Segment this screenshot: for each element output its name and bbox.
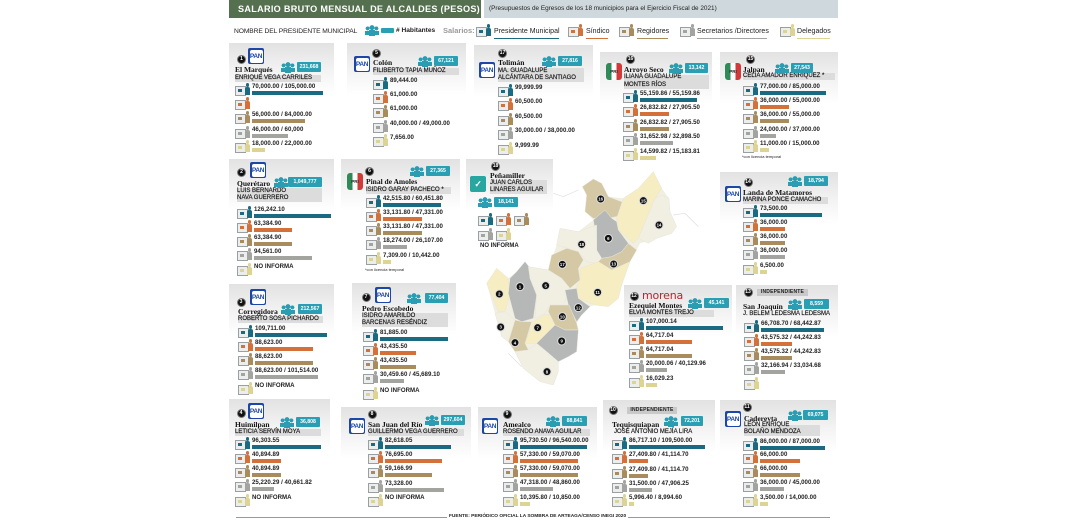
title bar — [229, 0, 481, 18]
panel: Huimilpan: 40,894.89 — [252, 451, 279, 458]
panel: Tequisquiapan: JOSÉ ANTONIO MEJÍA LIRA — [614, 428, 692, 434]
map of municipalities: 4 — [514, 340, 517, 345]
panel: Huimilpan: Huimilpan — [235, 420, 270, 429]
panel: Tolimán: 99,999.99 — [515, 84, 542, 91]
panel: Querétaro: 94,561.00 — [254, 248, 281, 255]
panel: Tolimán: 30,000.00 / 38,000.00 — [515, 127, 575, 134]
panel: Colón: 89,444.00 — [390, 77, 417, 84]
panel: El Marqués: 1 — [240, 56, 243, 62]
panel: Pinal de Amoles: PRI — [351, 179, 359, 184]
legend: delegados: Delegados — [797, 28, 831, 35]
panel: Corregidora — [229, 284, 334, 397]
panel: Amealco: 9 — [506, 410, 508, 416]
panel: Pinal de Amoles: 18,274.00 / 26,107.00 — [383, 237, 443, 244]
panel: Arroyo Seco: Arroyo Seco — [624, 65, 664, 74]
panel: Tequisquiapan: 10 — [610, 406, 616, 412]
panel: Amealco: Amealco — [503, 420, 531, 429]
panel: Corregidora: NO INFORMA — [255, 382, 295, 389]
panel: San Joaquín: 43,575.32 / 44,242.83 — [761, 334, 821, 341]
panel: Jalpan: 15 — [748, 56, 753, 62]
panel: Jalpan: 36,000.00 / 55,000.00 — [760, 111, 820, 118]
legend: inhabitants — [365, 25, 435, 36]
map of municipalities: 16 — [598, 197, 604, 202]
panel: Jalpan: 77,000.00 / 85,000.00 — [760, 83, 820, 90]
panel: Peñamiller: JUAN CARLOS — [490, 180, 532, 186]
panel: El Marqués: El Marqués — [235, 65, 273, 74]
panel: Pedro Escobedo — [352, 283, 456, 399]
map of municipalities: 2 — [498, 292, 501, 297]
panel: Pinal de Amoles: *con licencia temporal — [365, 267, 404, 272]
panel: Tolimán: 17 — [500, 50, 505, 56]
panel: El Marqués: 18,000.00 / 22,000.00 — [252, 140, 312, 147]
panel: Colón: 61,000.00 — [390, 105, 417, 112]
panel: Tequisquiapan: 27,409.80 / 41,114.70 — [629, 451, 689, 458]
panel: Cadereyta: 66,000.00 — [760, 465, 787, 472]
panel: Peñamiller: ✓ — [474, 178, 482, 188]
panel: Colón: 5 — [375, 50, 378, 56]
panel: Ezequiel Montes: 16,029.23 — [646, 375, 673, 382]
panel: Pedro Escobedo: Pedro Escobedo — [362, 304, 413, 313]
panel: Cadereyta: 86,000.00 / 87,000.00 — [760, 438, 820, 445]
map of municipalities: 10 — [560, 314, 565, 319]
panel: Pedro Escobedo: ISIDRO AMARILDO — [362, 312, 415, 318]
panel: Pedro Escobedo: 30,459.60 / 45,689.10 — [380, 371, 440, 378]
legend: sindico — [568, 24, 610, 39]
panel: Jalpan: 11,000.00 / 15,000.00 — [760, 140, 820, 147]
panel: Corregidora: 3 — [240, 298, 242, 304]
map of municipalities: 15 — [641, 198, 646, 203]
panel: Querétaro: 2 — [240, 169, 243, 175]
panel: Huimilpan: 36,808 — [300, 419, 316, 425]
panel: Querétaro: Querétaro — [237, 179, 270, 188]
panel: Pedro Escobedo: 81,885.00 — [380, 329, 407, 336]
panel: Cadereyta: 69,075 — [808, 412, 823, 418]
panel: Querétaro — [229, 159, 334, 277]
legend: presidente municipal — [476, 24, 560, 39]
legend: regidores: Regidores — [637, 28, 669, 35]
panel: Arroyo Seco: ILIANA GUADALUPE — [624, 74, 681, 80]
panel: Corregidora: 88,623.00 — [255, 339, 282, 346]
legend: salaries label: Salarios: — [443, 26, 475, 35]
map of municipalities: 1 — [519, 284, 522, 289]
panel: Arroyo Seco: PRI — [610, 69, 618, 74]
legend: president name: NOMBRE DEL PRESIDENTE MUNICIPAL — [234, 28, 357, 35]
subtitle bar — [484, 0, 838, 18]
map of municipalities: 17 — [560, 262, 565, 267]
legend: regidores — [619, 24, 669, 39]
panel: Landa de Matamoros — [720, 172, 838, 277]
panel: El Marqués — [229, 43, 334, 155]
panel: Tequisquiapan: 27,409.80 / 41,114.70 — [629, 466, 689, 473]
panel: Arroyo Seco: 31,652.98 / 32,898.50 — [640, 133, 700, 140]
panel: Landa de Matamoros: PAN — [727, 190, 739, 198]
panel: Peñamiller — [466, 159, 553, 251]
panel: Pedro Escobedo: 77,404 — [429, 295, 444, 301]
panel: Landa de Matamoros: MARINA PONCE CAMACHO — [743, 196, 821, 202]
panel: Tequisquiapan: 31,500.00 / 47,906.25 — [629, 480, 689, 487]
panel: Corregidora: ROBERTO SOSA PICHARDO — [238, 316, 319, 322]
map of municipalities: 18 — [579, 242, 585, 247]
panel: Tolimán: 9,999.99 — [515, 142, 539, 149]
panel: Arroyo Seco: 26,832.82 / 27,905.50 — [640, 119, 700, 126]
panel: Colón: 40,000.00 / 49,000.00 — [390, 120, 450, 127]
panel: Corregidora: PAN — [252, 294, 264, 300]
panel: Jalpan: 24,000.00 / 37,000.00 — [760, 126, 820, 133]
panel: Colón: 61,000.00 — [390, 91, 417, 98]
subtitle bar: (Presupuestos de Egresos de los 18 municipios para el Ejercicio Fiscal de 2021) — [489, 5, 717, 12]
panel: El Marqués: 231,668 — [300, 64, 318, 70]
panel: Landa de Matamoros: 36,000.00 — [760, 233, 787, 240]
map of municipalities: 7 — [536, 325, 539, 330]
panel: Ezequiel Montes: morena — [642, 289, 683, 302]
panel: Jalpan: Jalpan — [743, 65, 765, 74]
panel: San Juan del Río: NO INFORMA — [385, 494, 425, 501]
panel: Ezequiel Montes: ELVIA MONTES TREJO — [629, 310, 694, 316]
legend: delegados — [780, 24, 831, 39]
panel: El Marqués: 46,000.00 / 60,000 — [252, 126, 303, 133]
panel: Pinal de Amoles: 33,131.80 / 47,331.00 — [383, 209, 443, 216]
panel: Tolimán: Tolimán — [498, 58, 524, 67]
panel: Landa de Matamoros: 6,500.00 — [760, 262, 784, 269]
panel: Amealco: 47,318.00 / 48,860.00 — [520, 479, 580, 486]
panel: Amealco: 95,730.50 / 96,540.00.00 — [520, 437, 588, 444]
panel: Colón: FILIBERTO TAPIA MUÑOZ — [373, 68, 446, 74]
panel: Cadereyta — [720, 400, 836, 507]
map of municipalities: 5 — [544, 283, 547, 288]
map of municipalities: 8 — [546, 369, 549, 374]
panel: San Joaquín: San Joaquín — [743, 302, 783, 311]
panel: Pedro Escobedo: 7 — [365, 294, 367, 300]
panel: Pinal de Amoles: Pinal de Amoles — [366, 177, 417, 186]
legend — [234, 24, 831, 39]
panel: Peñamiller: NO INFORMA — [480, 243, 519, 249]
panel: San Joaquín: 66,708.70 / 68,442.87 — [761, 320, 821, 327]
panel: San Joaquín: INDEPENDIENTE — [761, 289, 804, 295]
panel: Pedro Escobedo: 43,435.50 — [380, 343, 407, 350]
panel: Pedro Escobedo: 43,435.50 — [380, 357, 407, 364]
panel: Cadereyta: 11 — [744, 404, 750, 410]
panel: Pedro Escobedo: PAN — [377, 292, 389, 298]
panel: Arroyo Seco: MONTES RÍOS — [624, 82, 666, 88]
panel: Pinal de Amoles: 6 — [368, 168, 371, 174]
panel: Corregidora: 88,623.00 — [255, 353, 282, 360]
panel: Landa de Matamoros: 18,794 — [808, 178, 824, 184]
panel: Cadereyta: BOLAÑO MENDOZA — [744, 428, 801, 434]
panel: Pinal de Amoles: 42,515.80 / 60,451.80 — [383, 195, 443, 202]
panel: San Juan del Río: 59,166.99 — [385, 465, 412, 472]
panel: Ezequiel Montes: Ezequiel Montes — [629, 301, 682, 310]
panel: San Juan del Río: 297,604 — [444, 417, 462, 423]
panel: Arroyo Seco: 14,599.82 / 15,183.81 — [640, 148, 700, 155]
panel: Jalpan: CELIA AMADOR ENRÍQUEZ * — [743, 73, 824, 79]
panel: San Joaquín: 32,166.94 / 33,034.68 — [761, 362, 821, 369]
panel: Ezequiel Montes: 64,717.04 — [646, 332, 673, 339]
map of municipalities: 14 — [657, 223, 662, 228]
panel: Huimilpan: 25,220.29 / 40,661.82 — [252, 479, 312, 486]
panel: Colón — [347, 43, 466, 149]
panel: Amealco: PAN — [484, 422, 496, 430]
panel: Pedro Escobedo: NO INFORMA — [380, 387, 420, 394]
panel: Querétaro: NO INFORMA — [254, 263, 294, 270]
panel: Huimilpan — [229, 399, 330, 507]
panel: San Juan del Río: 82,618.05 — [385, 437, 412, 444]
panel: Querétaro: 126,242.10 — [254, 206, 285, 213]
panel: San Juan del Río: 76,695.00 — [385, 451, 412, 458]
panel: Landa de Matamoros: 73,500.00 — [760, 205, 787, 212]
panel: Huimilpan: NO INFORMA — [252, 494, 292, 501]
panel: Pinal de Amoles: 7,309.00 / 10,442.00 — [383, 252, 440, 259]
panel: Huimilpan: 96,303.55 — [252, 437, 279, 444]
panel: Ezequiel Montes: 45,141 — [709, 300, 724, 306]
panel: Tequisquiapan: 5,996.40 / 8,994.60 — [629, 494, 682, 501]
panel: Querétaro: PAN — [252, 166, 264, 174]
panel: Querétaro: LUIS BERNARDO — [237, 188, 286, 194]
panel: Tolimán: MA. GUADALUPE — [498, 68, 547, 74]
panel: San Joaquín: 43,575.32 / 44,242.83 — [761, 348, 821, 355]
panel: Pedro Escobedo: BARCENAS RESÉNDIZ — [362, 320, 427, 326]
panel: Peñamiller: 18 — [493, 163, 498, 169]
panel: Querétaro: 1,049,777 — [293, 179, 317, 185]
panel: San Joaquín: 13 — [745, 288, 751, 294]
panel: Amealco: 57,330.00 / 59,070.00 — [520, 465, 580, 472]
panel: Arroyo Seco: 26,832.82 / 27,905.50 — [640, 104, 700, 111]
panel: San Juan del Río: 73,328.00 — [385, 480, 412, 487]
panel: Tolimán: 27,816 — [562, 58, 578, 64]
source footer: FUENTE: PERIÓDICO OFICIAL LA SOMBRA DE ARTEAGA/CENSO INEGI 2020 — [449, 514, 626, 519]
panel: San Juan del Río: GUILLERMO VEGA GUERRERO — [368, 428, 458, 434]
map of municipalities: 11 — [595, 290, 601, 295]
legend: secretarios: Secretarios /Directores — [697, 28, 769, 35]
panel: Huimilpan: PAN — [250, 408, 262, 414]
panel: Jalpan: PRI — [729, 69, 737, 74]
panel: Tequisquiapan: INDEPENDIENTE — [630, 407, 674, 413]
panel: Colón: 7,656.00 — [390, 134, 414, 141]
panel: Pinal de Amoles: 27,365 — [430, 168, 446, 174]
panel: Tequisquiapan: 86,717.10 / 109,500.00 — [629, 437, 692, 444]
map of municipalities: 3 — [499, 325, 502, 330]
panel: Cadereyta: 3,500.00 / 14,000.00 — [760, 494, 817, 501]
panel: Colón: Colón — [373, 58, 392, 67]
panel: Querétaro: NAVA GUERRERO — [237, 195, 288, 201]
panel: Ezequiel Montes: 20,000.06 / 40,129.96 — [646, 360, 706, 367]
panel: Amealco: 10,395.80 / 10,850.00 — [520, 494, 580, 501]
panel: Amealco: ROSENDO ANAVA AGUILAR — [503, 428, 581, 434]
panel: El Marqués: PAN — [250, 52, 262, 60]
panel: Huimilpan: 4 — [240, 410, 242, 416]
panel: Peñamiller: Peñamiller — [490, 171, 525, 180]
panel: San Juan del Río — [341, 407, 471, 507]
panel: San Joaquín — [736, 285, 838, 393]
panel: Amealco: 88,841 — [567, 418, 582, 424]
map of municipalities: 12 — [576, 305, 581, 310]
panel: Amealco — [478, 407, 597, 507]
panel: Cadereyta: LEÓN ENRIQUE — [744, 422, 789, 428]
panel: San Joaquín: 8,559 — [810, 301, 823, 307]
legend: sindico: Síndico — [586, 28, 610, 35]
panel: Tolimán — [474, 45, 593, 150]
panel: San Juan del Río: San Juan del Río — [368, 420, 422, 429]
panel: Pinal de Amoles: ISIDRO GARAY PACHECO * — [366, 186, 444, 192]
legend: secretarios — [680, 24, 769, 39]
panel: Tolimán: 60,500.00 — [515, 113, 542, 120]
panel: Arroyo Seco: 55,159.86 / 55,159.86 — [640, 90, 700, 97]
map of municipalities: 9 — [560, 339, 563, 344]
legend: inhabitants: # Habitantes — [396, 27, 435, 34]
panel: Ezequiel Montes: 64,717.04 — [646, 346, 673, 353]
panel: Tequisquiapan: Tequisquiapan — [612, 420, 659, 429]
title bar: SALARIO BRUTO MENSUAL DE ALCALDES (PESOS) — [238, 4, 480, 14]
panel: Corregidora: Corregidora — [238, 307, 278, 316]
panel: Tolimán: PAN — [481, 66, 493, 74]
panel: Peñamiller: 18,141 — [498, 199, 514, 205]
panel: Jalpan: 27,543 — [794, 65, 810, 71]
panel: Tequisquiapan — [603, 400, 715, 507]
panel: Colón: PAN — [356, 60, 368, 68]
panel: Tolimán: ALCÁNTARA DE SANTIAGO — [498, 75, 576, 81]
panel: Huimilpan: 40,894.89 — [252, 465, 279, 472]
panel: Arroyo Seco: 13,142 — [689, 65, 704, 71]
panel: San Juan del Río: 8 — [371, 410, 373, 416]
panel: Landa de Matamoros: Landa de Matamoros — [743, 188, 812, 197]
panel: Ezequiel Montes — [624, 285, 732, 392]
panel: Corregidora: 109,711.00 — [255, 325, 285, 332]
panel: Arroyo Seco: 16 — [628, 56, 633, 62]
panel: Tolimán: 60,500.00 — [515, 98, 542, 105]
panel: Cadereyta: 66,000.00 — [760, 451, 787, 458]
map of municipalities: 6 — [607, 236, 610, 241]
panel: Cadereyta: PAN — [727, 416, 739, 422]
map of municipalities: 13 — [611, 262, 617, 267]
panel: Arroyo Seco — [600, 52, 712, 162]
panel: San Juan del Río: PAN — [351, 422, 363, 430]
panel: Pinal de Amoles: 33,131.80 / 47,331.00 — [383, 223, 443, 230]
panel: San Joaquín: J. BELEM LEDESMA LEDESMA — [743, 311, 830, 317]
panel: Huimilpan: LETICIA SERVÍN MOYA — [235, 428, 300, 434]
panel: Corregidora: 88,623.00 / 101,514.00 — [255, 367, 318, 374]
map of municipalities — [486, 172, 698, 385]
panel: El Marqués: 70,000.00 / 105,000.00 — [252, 83, 315, 90]
panel: El Marqués: 56,000.00 / 84,000.00 — [252, 111, 312, 118]
panel: Colón: 67,121 — [438, 58, 454, 64]
panel: Querétaro: 63,384.90 — [254, 220, 281, 227]
panel: Jalpan — [720, 52, 838, 164]
panel: Ezequiel Montes: 12 — [631, 292, 637, 298]
panel: Landa de Matamoros: 36,000.00 — [760, 247, 787, 254]
panel: El Marqués: ENRIQUE VEGA CARRILES — [235, 75, 312, 81]
panel: Querétaro: 63,384.90 — [254, 234, 281, 241]
panel: Jalpan: *con licencia temporal — [742, 154, 781, 159]
panel: Cadereyta: 36,000.00 / 45,000.00 — [760, 479, 820, 486]
panel: Peñamiller: LINARES AGUILAR — [490, 187, 543, 193]
panel: Landa de Matamoros: 36,000.00 — [760, 219, 787, 226]
panel: Jalpan: 36,000.00 / 55,000.00 — [760, 97, 820, 104]
panel: Landa de Matamoros: 14 — [745, 178, 751, 184]
panel: Amealco: 57,330.00 / 59,070.00 — [520, 451, 580, 458]
panel: Corregidora: 212,567 — [301, 306, 319, 312]
panel: Pinal de Amoles — [341, 159, 460, 277]
panel: Tequisquiapan: 72,201 — [684, 418, 700, 424]
panel: Ezequiel Montes: 107,000.14 — [646, 318, 677, 325]
legend: presidente municipal: Presidente Municipal — [494, 28, 560, 35]
panel: Cadereyta: Cadereyta — [744, 414, 777, 423]
